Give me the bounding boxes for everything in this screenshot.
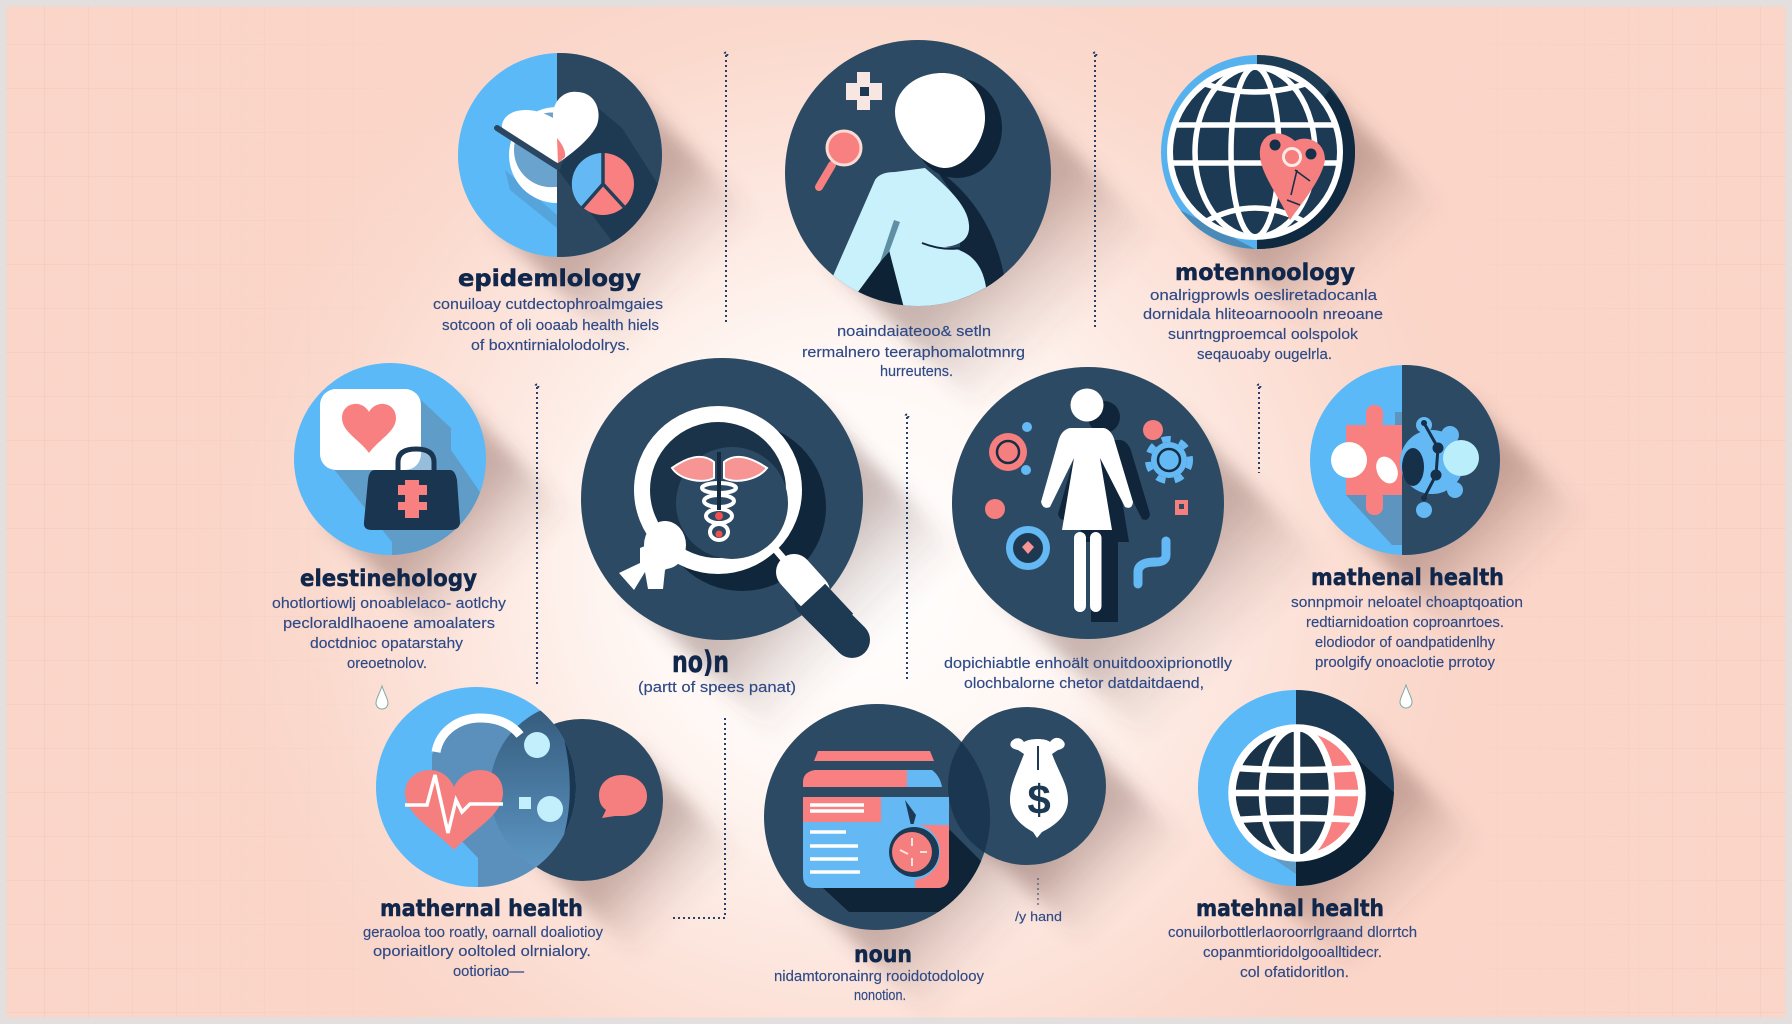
heading: noun [854,942,912,968]
panel: globe with heart pin [1143,50,1383,363]
description [802,324,1025,380]
icon: globe and pin [1161,55,1355,249]
description: of boxntirnialolodolrys. [471,338,630,354]
icon: browser card [764,704,990,930]
description: geraoloa too roatly, oarnall doaliotioy [363,925,604,941]
description: seqauoaby ougelrla. [1197,347,1332,363]
icon: overlapping heart circles [376,687,666,890]
description: rermalnero teeraphomalotmnrg [802,345,1025,361]
description: onalrigprowls oesliretadocanla [1150,288,1378,304]
description: pecloraldlhaoene amoalaters [283,616,495,632]
icon: molecule [1400,417,1479,518]
description: copanmtioridolgooalltidecr. [1203,945,1382,961]
description: oreoetnolov. [347,656,427,672]
description: redtiarnidoation coproanrtoes. [1306,615,1504,631]
long drop shadows [390,152,1525,945]
description [1168,925,1417,981]
heading: mathenal health [1311,565,1504,591]
icon: white hand [619,521,686,590]
heading: motennoology [1175,260,1355,286]
description: nonotion. [854,988,906,1004]
icon: ring target [1006,526,1050,570]
description: col ofatidoritlon. [1240,965,1349,981]
description [363,925,604,980]
description: doctdnioc opatarstahy [310,636,464,652]
description: oporiaitlory ooltoled olrnialory. [373,944,591,960]
panel: world globe [1168,685,1417,981]
description: sonnpmoir neloatel choaptqoation [1291,595,1523,611]
description [944,656,1233,692]
description [1143,288,1383,363]
panel: card and money bag [764,704,1106,1004]
icon: puzzle and molecule [1310,360,1507,560]
description: nidamtoronainrg rooidotodolooy [774,969,985,985]
dotted divider lines [536,52,1260,918]
description: dornidala hliteoarnoooln nreoane [1143,307,1383,323]
description: olochbalorne chetor datdaitdaend, [964,676,1204,692]
description: dopichiabtle enhoält onuitdooxiprionotlly [944,656,1233,672]
heading: elestinehology [300,566,477,592]
description: hurreutens. [880,364,953,380]
subheading: (partt of spees panat) [638,680,796,696]
panel: woman figure [944,367,1233,692]
description: proolgify onoaclotie prrotoy [1315,655,1496,671]
description: sunrtngproemcal oolspolok [1168,327,1359,343]
icon: heart card and bag [294,363,486,555]
description: elodiodor of oandpatidenlhy [1315,635,1496,651]
heading: matehnal health [1196,896,1384,922]
heading: no)n [672,645,729,679]
description: ohotlortiowlj onoablelaco- aotlchy [272,596,507,612]
panel: heart card and medical bag [272,363,507,709]
icon: money bag circle [948,707,1106,865]
icon: heart, clock and pie [458,50,668,260]
panel: epidemiology [433,50,668,354]
panel: central magnifier [581,358,863,696]
icon: coral gear [989,433,1027,471]
heading: mathernal health [380,896,583,922]
icon: droplet [376,686,388,709]
icon: money bag circle: $ [1027,776,1051,823]
description: sotcoon of oli ooaab health hiels [442,318,659,334]
icon: globe [1198,685,1401,890]
description: conuilorbottlerlaoroorrlgraand dlorrtch [1168,925,1417,941]
panel: pregnant figure [785,40,1051,380]
description [272,596,507,672]
icon: woman with gears [952,367,1224,639]
icon: magnifier with caduceus [581,358,863,640]
description: conuiloay cutdectophroalmgaies [433,297,663,313]
caption: /y hand [1015,909,1062,924]
heading: epidemlology [458,266,641,292]
description [1291,595,1523,671]
icon: droplet [1400,685,1412,708]
icon: caduceus [672,452,767,540]
panel: heart and speech bubble [363,687,666,980]
panel: puzzle [1291,360,1523,708]
icon: pregnant woman with cross and magnifier [785,40,1051,320]
description: noaindaiateoo& setln [837,324,991,340]
description: ootioriao— [453,964,525,980]
description [433,297,663,354]
icon: blue gear [1148,439,1190,481]
description [774,969,985,1004]
